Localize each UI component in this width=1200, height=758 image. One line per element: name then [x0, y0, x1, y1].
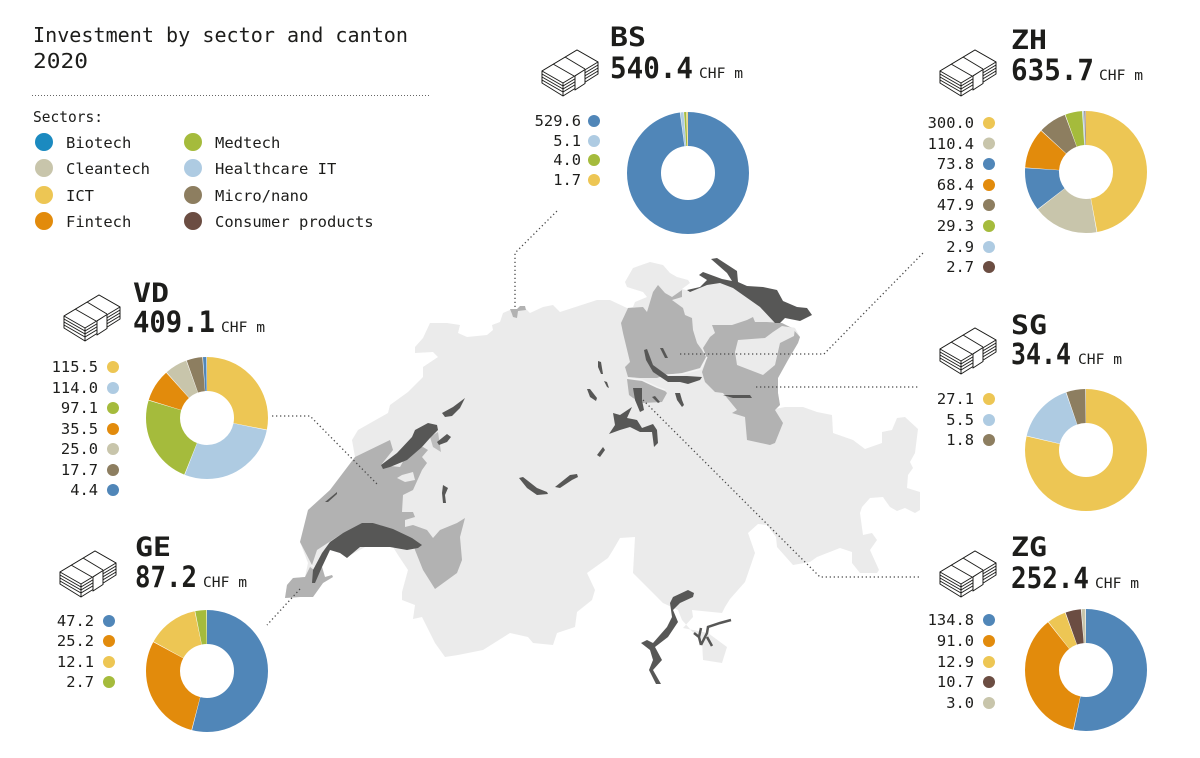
- panel: BS: [535, 22, 743, 217]
- map: Basel-Stadt: [510, 306, 526, 318]
- heading: ZG: ZG: [1011, 532, 1047, 563]
- values list: ZH: 68.4: [937, 176, 974, 194]
- values list: GE: 47.2: [57, 612, 94, 630]
- donut chart: SG: [1042, 406, 1130, 494]
- values list: SG: 5.5: [946, 411, 974, 429]
- values list: ZG: 3.0: [946, 694, 974, 712]
- heading: GE: CHF m: [203, 575, 247, 591]
- legend item: Healthcare IT: Healthcare IT: [215, 160, 336, 178]
- title: 2020: [33, 49, 88, 73]
- map: Geneva: [285, 567, 333, 598]
- map: canton borders: [311, 357, 707, 568]
- heading: ZH: ZH: [1011, 25, 1047, 56]
- leader line: VD: [272, 416, 377, 484]
- heading: SG: CHF m: [1078, 352, 1122, 368]
- values list: VD: 35.5: [61, 420, 98, 438]
- leader line: GE: [267, 589, 300, 625]
- legend item: Medtech: Medtech: [215, 134, 280, 152]
- icon: stack of banknotes: [542, 50, 598, 96]
- icon: stack of banknotes: [940, 328, 996, 374]
- values list: BS: 4.0: [553, 151, 581, 169]
- legend item: Fintech: Fintech: [66, 213, 131, 231]
- legend item: Micro/nano: Micro/nano: [215, 187, 308, 205]
- heading: BS: [610, 22, 743, 85]
- heading: VD: VD: [133, 278, 169, 309]
- values list: VD: 4.4: [70, 481, 98, 499]
- values list: VD: 97.1: [61, 399, 98, 417]
- values list: SG: 27.1: [937, 390, 974, 408]
- values list: ZH: 2.7: [946, 258, 974, 276]
- legend item: Medtech: [184, 133, 280, 152]
- heading: ZH: CHF m: [1099, 68, 1143, 84]
- values list: ZG: 91.0: [937, 632, 974, 650]
- heading: ZG: [1011, 532, 1139, 595]
- map: Vaud: [300, 440, 465, 589]
- legend: sectors: Sectors:: [33, 108, 103, 126]
- legend item: Biotech: [35, 133, 131, 152]
- panel: SG: [937, 310, 1130, 494]
- values list: BS: 5.1: [553, 132, 581, 150]
- legend: sectors: [33, 108, 374, 231]
- heading: ZG: 252.4: [1011, 561, 1089, 595]
- heading: BS: CHF m: [699, 66, 743, 82]
- values list: BS: 1.7: [553, 171, 581, 189]
- donut chart: VD: [163, 374, 251, 462]
- values list: SG: [937, 390, 995, 449]
- values list: VD: 25.0: [61, 440, 98, 458]
- panel: ZH: [928, 25, 1143, 276]
- map: Vaud enclave: [397, 472, 415, 482]
- heading: BS: BS: [610, 22, 646, 53]
- icon: stack of banknotes: [60, 551, 116, 597]
- values list: GE: 25.2: [57, 632, 94, 650]
- heading: VD: CHF m: [221, 320, 265, 336]
- heading: ZH: [1011, 25, 1143, 87]
- values list: BS: 529.6: [535, 112, 581, 130]
- values list: GE: 2.7: [66, 673, 94, 691]
- map: St. Gallen: [702, 317, 800, 445]
- map: Zug: [627, 379, 667, 403]
- values list: SG: 1.8: [946, 431, 974, 449]
- map of Switzerland: [285, 258, 920, 684]
- panel: GE: [57, 532, 251, 715]
- legend item: Consumer products: Consumer products: [215, 213, 374, 231]
- heading: GE: GE: [135, 532, 171, 563]
- values list: ZG: 12.9: [937, 653, 974, 671]
- donut chart: ZH: [1042, 128, 1130, 216]
- values list: ZH: 29.3: [937, 217, 974, 235]
- legend item: ICT: [35, 186, 94, 205]
- values list: VD: 114.0: [52, 379, 98, 397]
- values list: VD: 115.5: [52, 358, 98, 376]
- legend item: Cleantech: [35, 159, 150, 178]
- values list: VD: [52, 358, 119, 499]
- icon: stack of banknotes: [940, 551, 996, 597]
- icon: stack of banknotes: [64, 295, 120, 341]
- leader line: SG: [756, 386, 918, 388]
- values list: ZG: 10.7: [937, 673, 974, 691]
- values list: BS: [535, 112, 600, 189]
- heading: GE: 87.2: [135, 560, 197, 594]
- heading: GE: [135, 532, 247, 594]
- values list: ZH: 73.8: [937, 155, 974, 173]
- donut chart: ZG: [1042, 626, 1130, 714]
- leader line: ZH: [680, 252, 924, 354]
- donut chart: BS: [644, 129, 732, 217]
- heading: SG: [1011, 310, 1122, 371]
- legend item: Cleantech: Cleantech: [66, 160, 150, 178]
- map: country outline: [285, 262, 920, 663]
- donut chart: GE: [163, 627, 251, 715]
- values list: VD: 17.7: [61, 461, 98, 479]
- heading: VD: [133, 278, 265, 339]
- map: Zurich: [621, 285, 706, 378]
- heading: ZG: CHF m: [1095, 576, 1139, 592]
- values list: ZH: 2.9: [946, 238, 974, 256]
- values list: ZG: 134.8: [928, 611, 974, 629]
- map: lakes: [312, 258, 812, 684]
- panel: VD: [52, 278, 265, 499]
- legend item: ICT: ICT: [66, 187, 94, 205]
- values list: ZH: 110.4: [928, 135, 974, 153]
- values list: GE: 12.1: [57, 653, 94, 671]
- leader line: ZG: [643, 400, 920, 577]
- title: Investment by sector and canton: [33, 23, 408, 47]
- heading: SG: 34.4: [1011, 337, 1071, 371]
- heading: ZH: 635.7: [1011, 53, 1094, 87]
- title: [33, 23, 408, 73]
- legend item: Biotech: Biotech: [66, 134, 131, 152]
- values list: ZH: [928, 114, 995, 276]
- heading: VD: 409.1: [133, 305, 215, 339]
- heading: SG: SG: [1011, 310, 1047, 341]
- heading: BS: 540.4: [610, 51, 693, 85]
- legend item: Fintech: [35, 212, 131, 231]
- values list: ZH: 300.0: [928, 114, 974, 132]
- leader line: BS: [515, 210, 558, 307]
- values list: ZG: [928, 611, 995, 712]
- values list: GE: [57, 612, 115, 691]
- map: Appenzell enclave: [735, 326, 795, 375]
- map: Vaud exclave: [430, 432, 441, 452]
- icon: stack of banknotes: [940, 50, 996, 96]
- panel: ZG: [928, 532, 1139, 714]
- values list: ZH: 47.9: [937, 196, 974, 214]
